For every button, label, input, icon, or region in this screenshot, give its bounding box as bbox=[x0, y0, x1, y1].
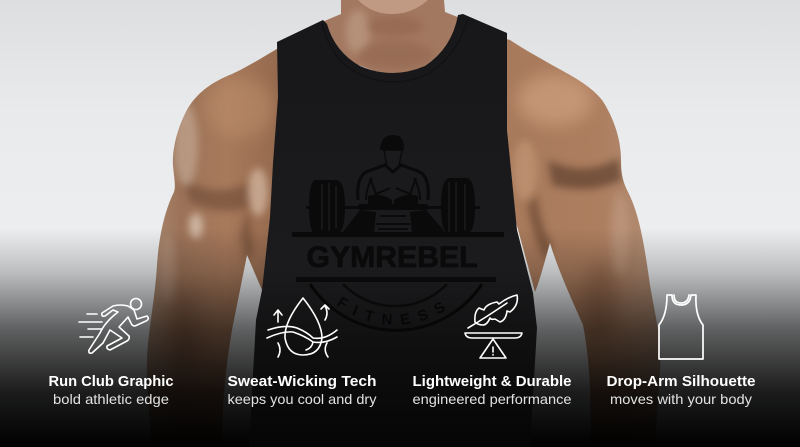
barbell bbox=[306, 178, 480, 234]
right arm bbox=[503, 38, 660, 447]
badge ring bbox=[310, 284, 482, 330]
feature: Lightweight & Durable bbox=[412, 295, 572, 407]
bottom rule bbox=[296, 277, 496, 282]
subtitle: keeps you cool and dry bbox=[228, 391, 376, 407]
icon: water drop with fabric layers bbox=[267, 298, 337, 357]
bottom fade bbox=[0, 228, 800, 447]
icon: tank top outline bbox=[659, 295, 703, 359]
subtitle: bold athletic edge bbox=[53, 391, 169, 407]
title: Run Club Graphic bbox=[48, 373, 174, 390]
muscle shading bbox=[162, 70, 628, 324]
brand name: GYMREBEL bbox=[306, 241, 478, 274]
feature: Sweat-Wicking Tech bbox=[228, 298, 376, 407]
tank top bbox=[249, 14, 537, 447]
fitness arc text: FITNESS bbox=[337, 296, 444, 324]
left arm bbox=[147, 47, 280, 447]
neck bbox=[322, 0, 465, 78]
feature: Run Club Graphic bbox=[48, 298, 174, 407]
subtitle: engineered performance bbox=[412, 391, 572, 407]
collar seam bbox=[322, 18, 468, 82]
lifter figure bbox=[342, 135, 446, 233]
subtitle: moves with your body bbox=[610, 391, 752, 407]
chin bbox=[358, 0, 428, 14]
title: Sweat-Wicking Tech bbox=[228, 373, 376, 390]
photo: torso and arms bbox=[147, 0, 660, 447]
title: Lightweight & Durable bbox=[412, 373, 572, 390]
top rule bbox=[292, 232, 504, 237]
icon: runner bbox=[79, 298, 148, 353]
icon: feather on balance bbox=[465, 295, 522, 358]
feature: Drop-Arm Silhouette bbox=[606, 295, 756, 407]
title: Drop-Arm Silhouette bbox=[606, 373, 756, 390]
logo: GymRebel Fitness bbox=[292, 135, 504, 332]
